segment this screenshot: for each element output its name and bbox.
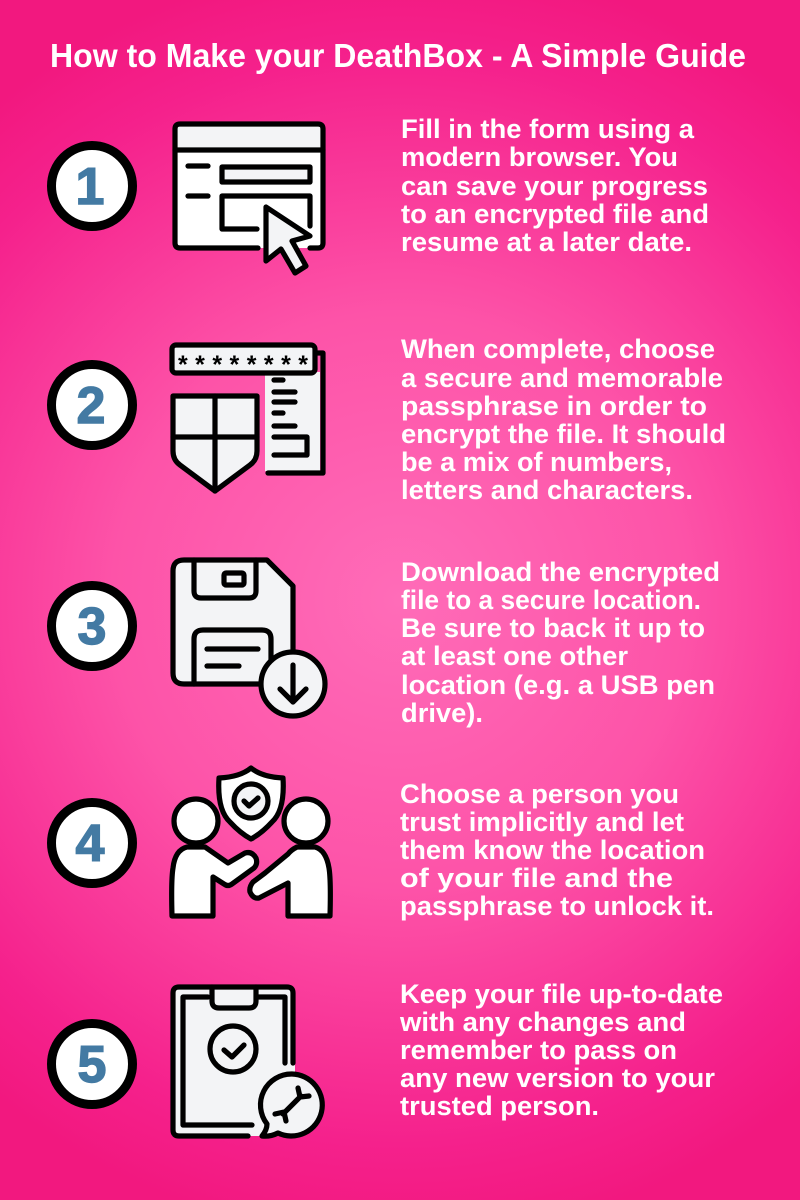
step 5 text: trusted person. — [400, 1091, 599, 1121]
step 1 text: can save your progress — [401, 171, 708, 201]
step 4 number badge — [52, 802, 132, 884]
icon: floppy disk with download arrow — [173, 560, 325, 716]
step 2 text — [401, 334, 726, 505]
step 5 text: Keep your file up-to-date — [400, 979, 723, 1009]
step 3 text: location (e.g. a USB pen — [401, 670, 715, 700]
step 5 number badge — [52, 1024, 132, 1104]
step 1 text: modern browser. You — [401, 142, 678, 172]
title: How to Make your DeathBox - A Simple Guide — [50, 37, 746, 74]
step 1 number badge: 1 — [76, 158, 104, 216]
step 1 text: to an encrypted file and — [401, 199, 709, 229]
step 2 number badge: 2 — [77, 377, 105, 435]
step 3 text: Be sure to back it up to — [401, 613, 705, 643]
step 4 text: them know the location — [400, 835, 705, 865]
step 2 text: passphrase in order to — [401, 391, 707, 421]
step 4 text: Choose a person you — [400, 779, 679, 809]
step 2 text: a secure and memorable — [401, 363, 723, 393]
step 2 number badge — [52, 364, 132, 446]
step 3 text: Download the encrypted — [401, 557, 720, 587]
icon: clipboard with check and wrench bubble — [172, 986, 322, 1136]
step 4 text: of your file and the — [400, 863, 673, 893]
step 1 text: Fill in the form using a — [401, 114, 695, 144]
step 3 text — [401, 557, 720, 728]
step 4 number badge: 4 — [76, 815, 105, 873]
step 3 text: file to a secure location. — [401, 585, 701, 615]
step 4 text — [400, 779, 714, 921]
step 1 text — [401, 114, 709, 257]
step 1 text: resume at a later date. — [401, 227, 692, 257]
step 5 text: with any changes and — [399, 1007, 686, 1037]
step 4 text: passphrase to unlock it. — [400, 891, 714, 921]
step 2 text: encrypt the file. It should — [401, 419, 726, 449]
step 2 text: letters and characters. — [401, 475, 693, 505]
step 5 number badge: 5 — [78, 1036, 106, 1094]
step 5 text: remember to pass on — [400, 1035, 677, 1065]
step 1 number badge — [52, 146, 132, 226]
step 2 text: be a mix of numbers, — [401, 447, 672, 477]
step 2 text: When complete, choose — [401, 334, 715, 364]
step 3 text: at least one other — [401, 641, 628, 671]
icon: password field, shield and document: ******** — [178, 351, 308, 379]
step 5 text — [399, 979, 723, 1121]
step 3 number badge — [52, 586, 132, 666]
step 3 text: drive). — [401, 698, 483, 728]
icon: two people shaking hands under a shield — [172, 768, 330, 916]
icon: password field, shield and document — [172, 345, 323, 491]
step 4 text: trust implicitly and let — [400, 807, 684, 837]
step 5 text: any new version to your — [400, 1063, 716, 1093]
icon: browser form with cursor — [175, 124, 323, 273]
step 3 number badge: 3 — [78, 598, 106, 656]
